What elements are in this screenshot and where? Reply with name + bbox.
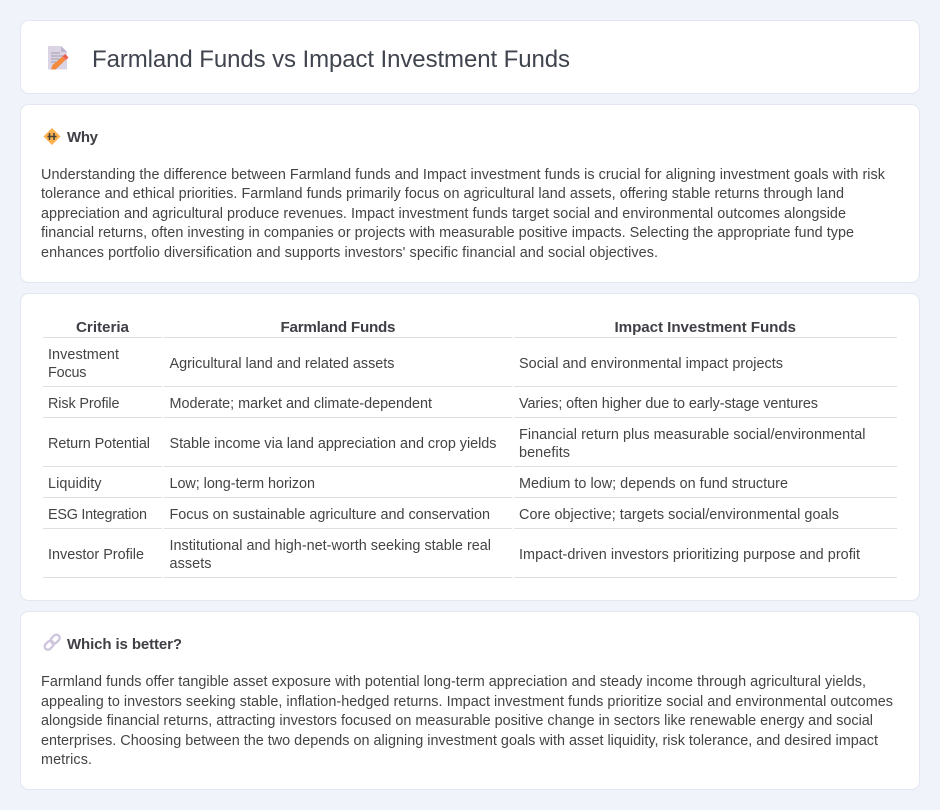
header card background <box>20 20 920 94</box>
row: risk profile: Moderate; market and climate-dependent <box>170 396 432 412</box>
which card background <box>20 612 920 790</box>
row: investor profile: Impact-driven investors prioritizing purpose and profit <box>519 547 860 563</box>
row: investment focus <box>43 347 897 387</box>
row: risk profile <box>43 396 897 418</box>
row: return potential: Financial return plus measurable social/environmental <box>519 427 866 443</box>
row: investor profile: assets <box>170 556 212 572</box>
panel: comparison table <box>20 294 920 600</box>
row: risk profile: Varies; often higher due to early-stage ventures <box>519 396 818 412</box>
which paragraph: Farmland funds offer tangible asset exposure with potential long-term appreciation and steady income through agricultural yields, <box>41 674 866 690</box>
icon: document with pencil <box>48 46 68 70</box>
panel: title header <box>20 20 920 94</box>
why paragraph: appreciation and agricultural produce revenues. Impact investment funds target social and environmental outcomes alongside <box>41 206 846 222</box>
row: liquidity <box>43 476 897 498</box>
which paragraph: enterprises. Choosing between the two depends on aligning investment goals with asset liquidity, risk tolerance, and desired impact <box>41 733 878 749</box>
row: esg integration: ESG Integration <box>48 507 147 523</box>
table header row: Farmland Funds <box>280 319 396 336</box>
table header row: Criteria <box>76 319 130 336</box>
which paragraph: metrics. <box>41 752 92 768</box>
row: investor profile <box>43 538 897 578</box>
row: investor profile: Investor Profile <box>48 547 144 563</box>
why card background <box>20 104 920 282</box>
row: return potential <box>43 427 897 467</box>
row: investment focus: Agricultural land and related assets <box>170 356 394 372</box>
table header row <box>43 319 897 338</box>
which paragraph: appealing to investors seeking stable, inflation-hedged returns. Impact investment funds prioritize social and environmental outcomes <box>41 694 893 710</box>
table header row: Impact Investment Funds <box>614 319 796 336</box>
why paragraph: enhances portfolio diversification and supports investors' specific financial and social objectives. <box>41 245 658 261</box>
why paragraph <box>41 167 886 261</box>
heading: which is better: Which is better? <box>67 636 182 653</box>
row: risk profile: Risk Profile <box>48 396 120 412</box>
row: liquidity: Liquidity <box>48 476 102 492</box>
row: esg integration: Core objective; targets social/environmental goals <box>519 507 839 523</box>
panel: why <box>20 104 920 282</box>
row: return potential: Return Potential <box>48 436 150 452</box>
row: investment focus: Focus <box>48 365 86 381</box>
row: liquidity: Low; long-term horizon <box>170 476 315 492</box>
row: return potential: benefits <box>519 445 570 461</box>
why paragraph: Understanding the difference between Farmland funds and Impact investment funds is crucial for aligning investment goals with risk <box>41 167 886 183</box>
table card background <box>20 294 920 600</box>
icon: orange diamond sign <box>44 128 60 145</box>
which paragraph <box>41 674 893 768</box>
row: return potential: Stable income via land appreciation and crop yields <box>170 436 496 452</box>
row: liquidity: Medium to low; depends on fund structure <box>519 476 788 492</box>
which paragraph: alongside financial returns, attracting investors focused on measurable positive change in sectors like renewable energy and social <box>41 713 873 729</box>
panel: which is better <box>20 612 920 790</box>
row: investment focus: Investment <box>48 347 119 363</box>
row: esg integration <box>43 507 897 529</box>
heading: why: Why <box>67 129 99 146</box>
row: esg integration: Focus on sustainable agriculture and conservation <box>170 507 490 523</box>
row: investor profile: Institutional and high-net-worth seeking stable real <box>170 538 491 554</box>
row: investment focus: Social and environmental impact projects <box>519 356 783 372</box>
why paragraph: financial returns, often investing in companies or projects with measurable positive impacts. Selecting the appropriate fund type <box>41 225 854 241</box>
title: Farmland Funds vs Impact Investment Funds <box>92 46 570 73</box>
why paragraph: tolerance and ethical priorities. Farmland funds primarily focus on agricultural land assets, offering stable returns through land <box>41 186 844 202</box>
icon: chain link <box>43 633 61 651</box>
